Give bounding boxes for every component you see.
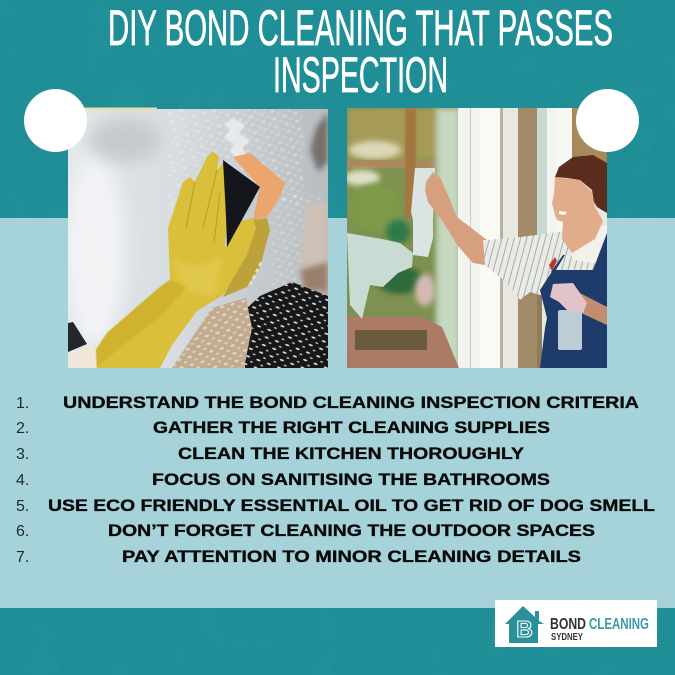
shirt xyxy=(483,232,595,300)
face and neck xyxy=(552,177,603,253)
logo wordmark: CLEANING xyxy=(589,616,649,633)
background: bottom band texture xyxy=(0,608,675,675)
numbered list: items: PAY ATTENTION TO MINOR CLEANING DETAILS xyxy=(122,547,581,566)
numbered list: items: CLEAN THE KITCHEN THOROUGHLY xyxy=(178,444,525,463)
background: bottom teal band xyxy=(0,608,675,675)
numbered list: numbers: 5. xyxy=(16,498,29,515)
icon: house with letter B: B xyxy=(516,616,533,642)
white circle left xyxy=(24,89,87,152)
numbered list: numbers: 1. xyxy=(16,395,29,412)
logo: Bond Cleaning Sydney xyxy=(495,600,657,647)
numbered list: numbers: 7. xyxy=(16,549,29,566)
numbered list: items: UNDERSTAND THE BOND CLEANING INSPECTION CRITERIA xyxy=(63,393,639,412)
icon: house with letter B xyxy=(505,606,544,643)
numbered list: items: GATHER THE RIGHT CLEANING SUPPLIES xyxy=(153,418,550,437)
window frames xyxy=(458,108,480,368)
sponge xyxy=(233,153,285,220)
numbered list: items: FOCUS ON SANITISING THE BATHROOMS xyxy=(152,470,550,489)
outdoor furniture reflection xyxy=(347,317,459,368)
numbered list: items: DON’T FORGET CLEANING THE OUTDOOR SPACES xyxy=(108,521,595,540)
spray bottle xyxy=(558,310,582,350)
reflected cloth and bottle xyxy=(411,168,435,257)
numbered list: items: USE ECO FRIENDLY ESSENTIAL OIL TO GET RID OF DOG SMELL xyxy=(48,496,655,515)
yellow glove xyxy=(96,151,256,368)
photo: yellow gloved hand cleaning glass with sponge xyxy=(65,109,328,368)
bubbly arm behind glass xyxy=(172,298,252,368)
hair xyxy=(555,155,607,213)
reflected sleeve xyxy=(347,233,413,319)
garden reflection xyxy=(347,108,459,368)
title xyxy=(108,0,613,103)
gloved hand xyxy=(550,283,587,313)
numbered list: numbers: 3. xyxy=(16,446,29,463)
apron xyxy=(540,233,607,368)
logo wordmark: BOND xyxy=(550,616,586,633)
numbered list: numbers xyxy=(16,395,29,566)
arm xyxy=(425,172,487,265)
numbered list: numbers: 4. xyxy=(16,472,29,489)
numbered list: numbers: 6. xyxy=(16,523,29,540)
logo wordmark xyxy=(550,616,649,643)
white circle right xyxy=(576,89,639,152)
logo wordmark: SYDNEY xyxy=(551,632,583,643)
decorative yellow line on photo top xyxy=(68,108,157,110)
numbered list: items xyxy=(48,393,655,566)
photo: woman cleaning window xyxy=(344,108,607,368)
background: top teal band xyxy=(0,0,675,218)
forearm xyxy=(580,293,607,325)
title: INSPECTION xyxy=(273,47,448,103)
far hand behind glass xyxy=(223,218,270,297)
numbered list: numbers: 2. xyxy=(16,420,29,437)
dark background reflection xyxy=(310,112,328,172)
background: top band texture xyxy=(0,0,675,218)
